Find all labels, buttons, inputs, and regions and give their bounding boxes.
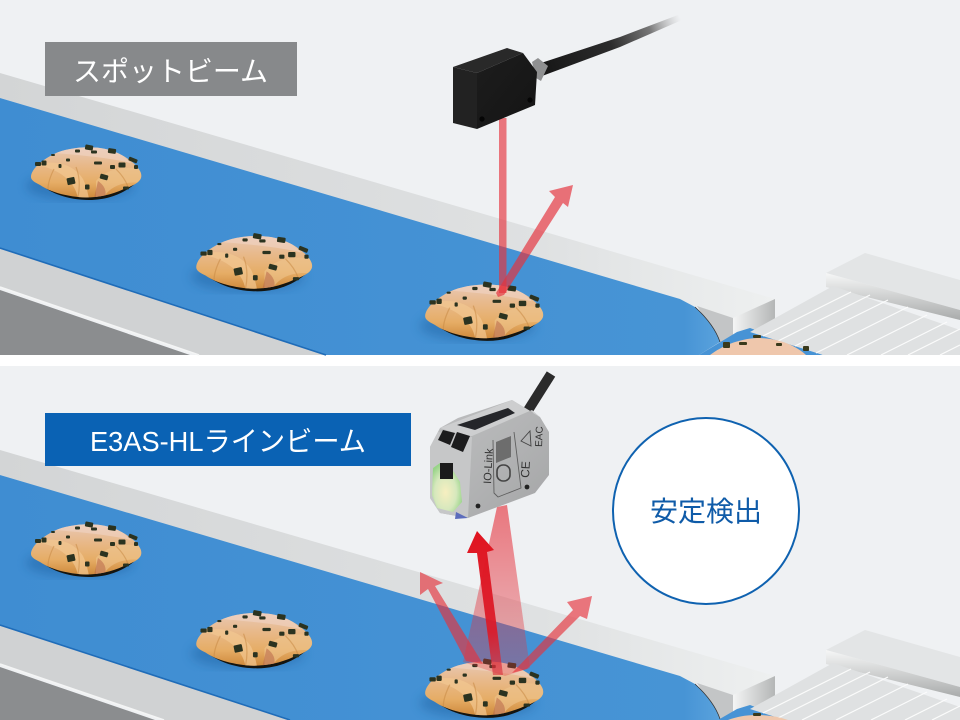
sensor left face [453,67,477,129]
cookie 3 [420,281,543,341]
conveyor back rail [0,73,775,342]
heading: E3AS-HL line beam label [45,413,411,466]
heading: spot beam label [45,42,297,96]
sensor buttons [438,430,470,452]
sensor EAC mark: EAC [534,426,546,447]
sensor warning triangle [521,431,531,446]
sensor cable [538,15,682,76]
sensor black window [440,463,453,479]
next conveyor: belt edge [699,328,823,355]
sensor connector [532,58,548,81]
line beam fan [463,505,530,676]
sensor blue base [455,512,468,519]
cookie 1 [26,521,141,577]
cookie 3 [420,658,543,718]
sensor label [493,432,521,497]
blue conveyor belt [0,475,720,720]
sensor brand text: IO-Link [482,448,496,484]
panel: line beam scene [0,366,960,720]
heading: spot beam label: スポットビーム [73,56,268,87]
cookie 2 [191,233,312,291]
spot beam reflected arrow [496,185,573,297]
blue conveyor belt [0,98,720,355]
centre reflected arrow [467,531,503,675]
cookie 2 [191,610,312,668]
background wall [0,0,960,355]
next conveyor: slats [750,286,960,355]
conveyor front rail [0,625,290,720]
next conveyor: belt edge [718,705,790,720]
icon: black spot sensor [453,15,682,129]
right reflected arrow [512,596,592,673]
heading: E3AS-HL line beam label: E3AS-HLラインビーム [90,426,366,457]
sensor main face [477,53,537,129]
background wall [0,366,960,720]
sensor CE mark: CE [518,461,533,478]
sensor top face [440,400,540,436]
left reflected arrow [420,572,483,664]
sensor LED window [432,463,462,512]
next conveyor: back rail [826,630,960,697]
sensor body [430,400,549,518]
cookie 1 [26,144,141,200]
sensor top face [453,48,523,73]
sensor cable [527,374,551,412]
spot beam incident line [499,118,506,293]
sensor end face [430,432,472,518]
panel: spot beam scene [0,0,960,355]
callout: stable detection [613,418,799,604]
conveyor scene [0,450,960,720]
cookie 4 [710,335,809,355]
conveyor back rail [0,450,775,719]
sensor top display [457,408,515,430]
next conveyor: slats [750,663,960,720]
next conveyor: back rail [826,253,960,320]
icon: E3AS-HL sensor [430,374,551,519]
conveyor front rail [0,248,326,355]
callout: stable detection: 安定検出 [650,496,762,527]
cookie 4 [728,713,788,720]
